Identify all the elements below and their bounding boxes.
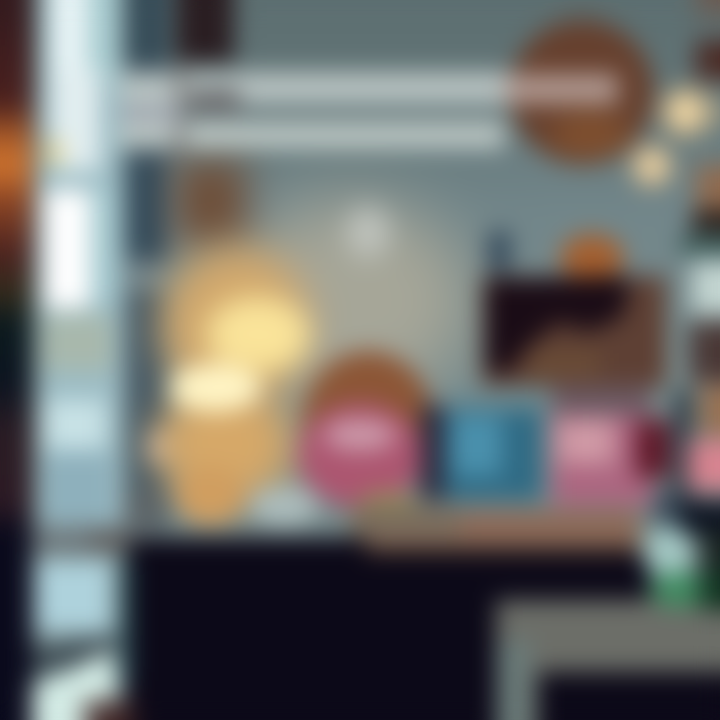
blurred title text [120, 66, 510, 156]
dark window column [124, 0, 170, 530]
dark brown curtain top [176, 0, 234, 62]
warm light on window frame [45, 138, 63, 166]
round pink pillow [250, 351, 434, 526]
right edge items [674, 0, 720, 520]
green and white object [644, 490, 720, 610]
dark wood shelf display [482, 232, 666, 386]
lamp glow [155, 245, 310, 525]
grey furniture frame [496, 600, 720, 720]
dark foreground block [80, 532, 650, 720]
warm brown patch [176, 160, 246, 245]
pink square pillow [552, 385, 670, 505]
hanging lights [630, 86, 712, 188]
wooden table top [350, 506, 640, 558]
blue pillow [420, 388, 544, 500]
left dark edge with orange glow [0, 0, 32, 720]
window panes [22, 0, 124, 720]
round wooden wall decoration [506, 20, 654, 164]
